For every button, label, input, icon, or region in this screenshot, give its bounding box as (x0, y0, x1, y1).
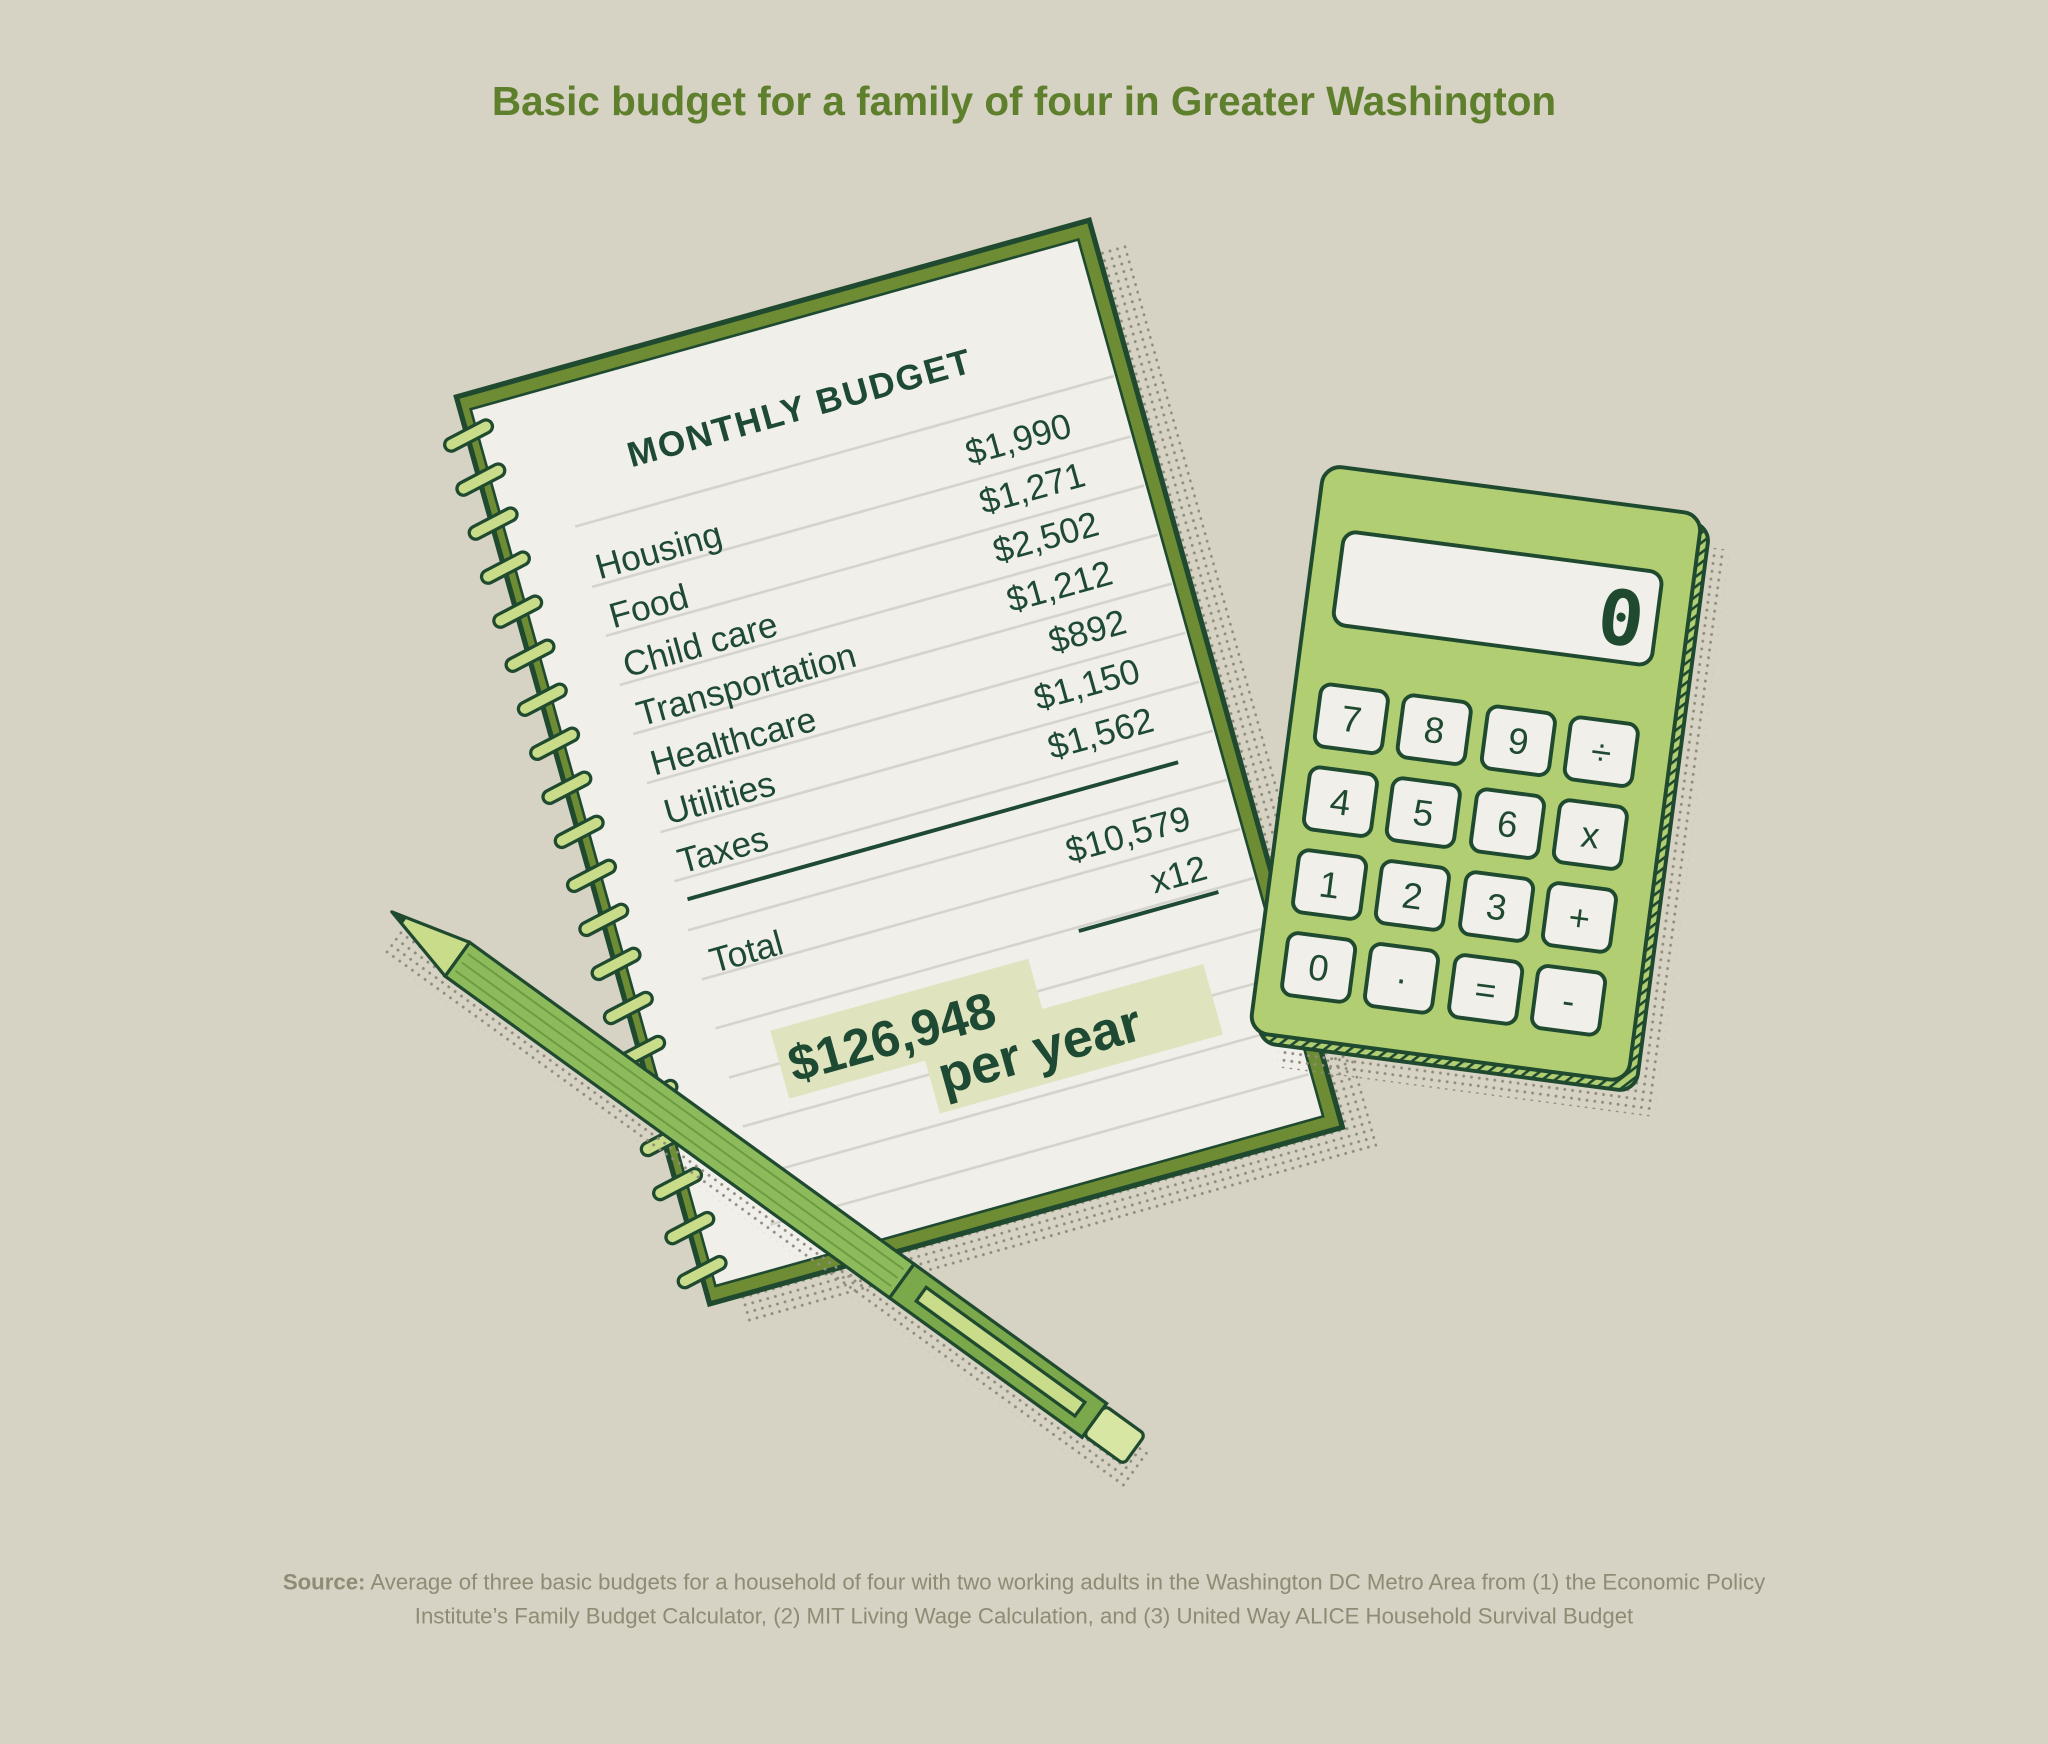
annual total highlight: $126,948 (782, 981, 1002, 1093)
calculator (1245, 465, 1733, 1117)
keypad (1281, 683, 1639, 1036)
budget list: $1,150 (1030, 652, 1144, 718)
calculator: = (1472, 968, 1499, 1012)
budget list: $1,562 (1044, 701, 1158, 767)
display (1332, 531, 1663, 667)
title: Basic budget for a family of four in Greater Washington (492, 78, 1556, 124)
calculator: 7 (1339, 698, 1364, 741)
total: x12 (1146, 848, 1211, 901)
total (702, 797, 1218, 1029)
budget list: $1,212 (1002, 553, 1117, 620)
total: $10,579 (1062, 799, 1195, 871)
display: 0 (1592, 572, 1649, 665)
budget list: Food (605, 577, 693, 636)
source note: Source: Average of three basic budgets for a household of four with two working adults in the Washington DC Metro Area from (1) the Economic Policy (283, 1570, 1766, 1595)
calculator: 4 (1328, 781, 1353, 824)
budget list (588, 406, 1161, 881)
heading: monthly budget: MONTHLY BUDGET (623, 342, 977, 475)
calculator: 3 (1484, 885, 1509, 929)
calculator: 9 (1506, 720, 1531, 763)
calculator: + (1566, 896, 1593, 940)
budget list: Child care (619, 605, 782, 685)
source note: Institute’s Family Budget Calculator, (2) MIT Living Wage Calculation, and (3) United Way ALICE Household Survival Budget (415, 1604, 1633, 1629)
budget list: $1,990 (961, 406, 1076, 473)
pen (367, 895, 1160, 1493)
budget list: $2,502 (989, 504, 1103, 571)
calculator: 0 (1306, 946, 1331, 990)
calculator: 2 (1400, 874, 1425, 918)
source note (283, 1570, 1766, 1629)
budget list: $1,271 (975, 455, 1089, 522)
budget list: Healthcare (646, 700, 821, 783)
annual total highlight: per year (932, 993, 1148, 1106)
budget list: $892 (1044, 603, 1130, 661)
annual total highlight (770, 914, 1223, 1151)
calculator: 5 (1410, 791, 1436, 835)
budget list: Housing (591, 515, 726, 587)
budget list: Transportation (632, 636, 860, 734)
notebook (432, 213, 1379, 1341)
calculator: 1 (1317, 863, 1342, 907)
budget list: Utilities (660, 764, 780, 832)
calculator: - (1560, 980, 1577, 1022)
budget list: Taxes (673, 819, 773, 881)
calculator: x (1579, 814, 1602, 857)
calculator: 8 (1421, 709, 1447, 752)
calculator: ÷ (1589, 731, 1614, 774)
calculator: 6 (1495, 803, 1520, 846)
total: Total (705, 923, 787, 981)
spiral binding (439, 417, 731, 1291)
calculator: · (1393, 958, 1410, 1000)
